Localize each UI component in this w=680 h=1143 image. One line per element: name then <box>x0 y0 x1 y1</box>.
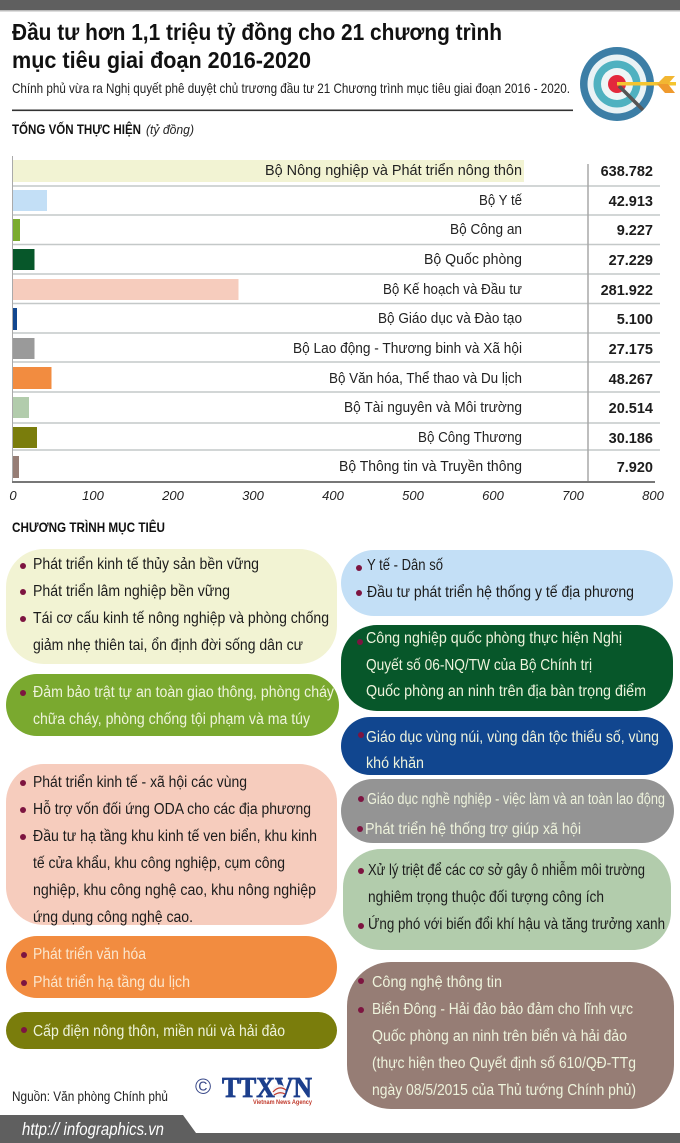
axis labels: 700 <box>562 488 585 503</box>
panel: education programs <box>341 717 673 775</box>
bar values: 5.100 <box>617 312 653 328</box>
panel: agriculture programs: Phát triển kinh tế thủy sản bền vững <box>33 556 259 573</box>
axis labels: 800 <box>642 488 665 503</box>
panel: culture and tourism programs: Phát triển văn hóa <box>33 946 146 963</box>
bar values: 7.920 <box>617 460 653 476</box>
axis labels: 200 <box>161 488 185 503</box>
heading: total capital: (tỷ đồng) <box>146 122 194 137</box>
panel: labour and social programs <box>341 779 674 843</box>
footer bar: http:// infographics.vn <box>22 1119 164 1139</box>
panel: agriculture programs: giảm nhẹ thiên tai, ổn định đời sống dân cư <box>33 637 303 654</box>
panel: defence programs: Quyết số 06-NQ/TW của Bộ Chính trị <box>366 657 592 674</box>
axis labels: 400 <box>322 488 345 503</box>
bar labels: Bộ Tài nguyên và Môi trường <box>344 399 522 416</box>
panel: planning and investment programs: Đầu tư hạ tầng khu kinh tế ven biển, khu kinh <box>33 828 317 845</box>
panel: agriculture programs <box>6 549 337 664</box>
bar values: 48.267 <box>609 372 653 388</box>
panel: information and islands programs <box>347 962 674 1109</box>
bar labels: Bộ Nông nghiệp và Phát triển nông thôn <box>265 162 522 179</box>
panel: planning and investment programs: Hỗ trợ vốn đối ứng ODA cho các địa phương <box>33 801 311 818</box>
bar values: 27.229 <box>609 253 653 269</box>
panel: planning and investment programs: ứng dụng công nghệ cao. <box>33 909 193 926</box>
bar chart <box>9 156 665 503</box>
panel: planning and investment programs: Phát triển kinh tế - xã hội các vùng <box>33 774 247 791</box>
title <box>12 19 502 73</box>
bar values: 42.913 <box>609 194 653 210</box>
bar values: 9.227 <box>617 223 653 239</box>
panel: defence programs <box>341 625 673 711</box>
panel: agriculture programs: Tái cơ cấu kinh tế nông nghiệp và phòng chống <box>33 610 329 627</box>
axis labels: 600 <box>482 488 505 503</box>
bar labels: Bộ Công an <box>450 221 522 238</box>
bars <box>13 160 524 478</box>
subtitle: Chính phủ vừa ra Nghị quyết phê duyệt chủ trương đầu tư 21 Chương trình mục tiêu giai đoạn 2016 - 2020. <box>12 80 570 96</box>
bar values <box>601 164 653 476</box>
bar labels: Bộ Lao động - Thương binh và Xã hội <box>293 340 522 357</box>
bar labels <box>265 162 523 475</box>
panel: environment programs <box>343 849 671 950</box>
heading: total capital: TỔNG VỐN THỰC HIỆN <box>12 122 141 137</box>
logo: TTXVN: TTXVN <box>222 1072 312 1104</box>
source: Nguồn: Văn phòng Chính phủ <box>12 1089 168 1104</box>
bar labels: Bộ Công Thương <box>418 429 522 446</box>
title: Đầu tư hơn 1,1 triệu tỷ đồng cho 21 chương trình <box>12 19 502 45</box>
panel: information and islands programs: ngày 08/5/2015 của Thủ tướng Chính phủ) <box>372 1082 636 1099</box>
axis labels <box>9 488 665 503</box>
panel: information and islands programs: Công nghệ thông tin <box>372 974 502 991</box>
panel: health programs: Đầu tư phát triển hệ thống y tế địa phương <box>367 584 634 601</box>
panel: information and islands programs: Quốc phòng an ninh trên biển và hải đảo <box>372 1028 627 1045</box>
logo: TTXVN <box>195 1072 313 1106</box>
icon: target with arrow <box>580 47 676 121</box>
panel: information and islands programs: (thực hiện theo Quyết định số 610/QĐ-TTg <box>372 1055 636 1072</box>
panel: planning and investment programs <box>6 764 337 926</box>
bar labels: Bộ Y tế <box>479 192 523 209</box>
bar labels: Bộ Văn hóa, Thể thao và Du lịch <box>329 370 522 387</box>
bar labels: Bộ Giáo dục và Đào tạo <box>378 310 522 327</box>
panel: public security programs: Đảm bảo trật tự an toàn giao thông, phòng cháy <box>33 684 334 701</box>
bar labels: Bộ Thông tin và Truyền thông <box>339 458 522 475</box>
bar values: 30.186 <box>609 431 653 447</box>
bar labels: Bộ Kế hoạch và Đầu tư <box>383 281 522 298</box>
panel: labour and social programs: Phát triển hệ thống trợ giúp xã hội <box>365 821 581 838</box>
bar values: 281.922 <box>601 283 653 299</box>
axis labels: 300 <box>242 488 265 503</box>
footer bar <box>0 1115 680 1143</box>
panel: rural electricity program: Cấp điện nông thôn, miền núi và hải đảo <box>33 1023 285 1040</box>
panel: defence programs: Quốc phòng an ninh trên địa bàn trọng điểm <box>366 683 646 700</box>
panel: information and islands programs: Biển Đông - Hải đảo bảo đảm cho lĩnh vực <box>372 1001 633 1018</box>
panel: public security programs: chữa cháy, phòng chống tội phạm và ma túy <box>33 711 310 728</box>
top bar <box>0 0 680 12</box>
heading: target programs: CHƯƠNG TRÌNH MỤC TIÊU <box>12 518 165 535</box>
panel: rural electricity program <box>6 1012 337 1049</box>
panel: education programs: khó khăn <box>366 755 424 772</box>
title: mục tiêu giai đoạn 2016-2020 <box>12 47 311 73</box>
logo: TTXVN: © <box>195 1074 211 1099</box>
panel: agriculture programs: Phát triển lâm nghiệp bền vững <box>33 583 230 600</box>
panel: culture and tourism programs: Phát triển hạ tầng du lịch <box>33 974 190 991</box>
panel: defence programs: Công nghiệp quốc phòng thực hiện Nghị <box>366 630 622 647</box>
panel: education programs: Giáo dục vùng núi, vùng dân tộc thiểu số, vùng <box>366 729 659 746</box>
bar values: 20.514 <box>609 401 653 417</box>
panel: planning and investment programs: tế cửa khẩu, khu công nghiệp, cụm công <box>33 855 285 872</box>
panel: health programs: Y tế - Dân số <box>367 557 443 574</box>
axis labels: 100 <box>82 488 105 503</box>
logo: TTXVN: Vietnam News Agency <box>253 1100 313 1106</box>
panel: planning and investment programs: nghiệp, khu công nghệ cao, khu nông nghiệp <box>33 882 316 899</box>
panel: health programs <box>341 550 673 616</box>
panel: culture and tourism programs <box>6 936 337 998</box>
axis labels: 500 <box>402 488 425 503</box>
bar values: 638.782 <box>601 164 653 180</box>
panel: public security programs <box>6 674 339 736</box>
bar labels: Bộ Quốc phòng <box>424 251 522 268</box>
axis labels: 0 <box>9 488 17 503</box>
panel: environment programs: nghiêm trọng thuộc đối tượng công ích <box>368 889 604 906</box>
bar values: 27.175 <box>609 342 653 358</box>
